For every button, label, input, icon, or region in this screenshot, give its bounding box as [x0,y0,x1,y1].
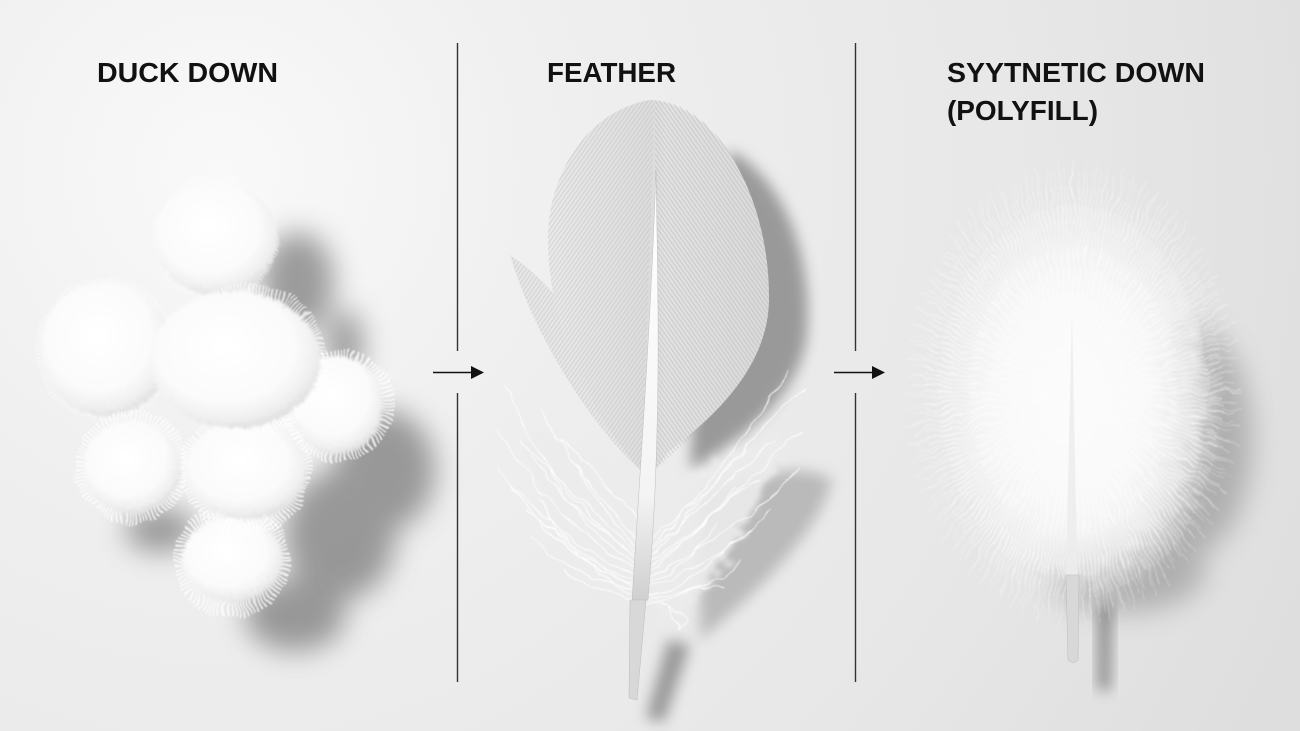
quill: feather [629,170,658,700]
puff: lower right [291,356,383,454]
puff: center [150,292,320,428]
puff: bottom [182,516,282,604]
title: synthetic down (polyfill): (POLYFILL) [947,95,1098,126]
illustration: feather [498,100,832,722]
title: synthetic down (polyfill) [947,57,1205,126]
puff: left [41,282,171,416]
shadow: feather [646,150,832,722]
divider: left upper and lower [456,43,458,682]
side vane: feather [510,255,640,470]
illustration: synthetic down [915,174,1252,690]
puff: lower left [83,421,181,513]
illustration: duck down clusters [41,181,435,651]
shadow: synthetic down [1045,325,1252,612]
stem: synthetic down [1066,310,1079,662]
fluffy lower barbs: feather [498,370,805,632]
shadow: duck down clusters [125,232,435,651]
vane: feather [548,100,769,474]
puff: lower center [185,418,307,522]
title: duck down: DUCK DOWN [97,57,278,88]
radial fibres: synthetic down [915,174,1231,610]
arrow: feather to synthetic down [834,366,885,379]
fluff body: synthetic down [923,183,1223,607]
stem shadow: synthetic down [1098,605,1112,690]
arrow: duck down to feather [433,366,484,379]
puff: top [154,181,278,295]
title: synthetic down (polyfill): SYYTNETIC DOWN [947,57,1205,88]
fluffy lower barbs body: feather [525,436,785,625]
title: feather: FEATHER [547,57,676,88]
divider: right upper and lower [854,43,856,682]
